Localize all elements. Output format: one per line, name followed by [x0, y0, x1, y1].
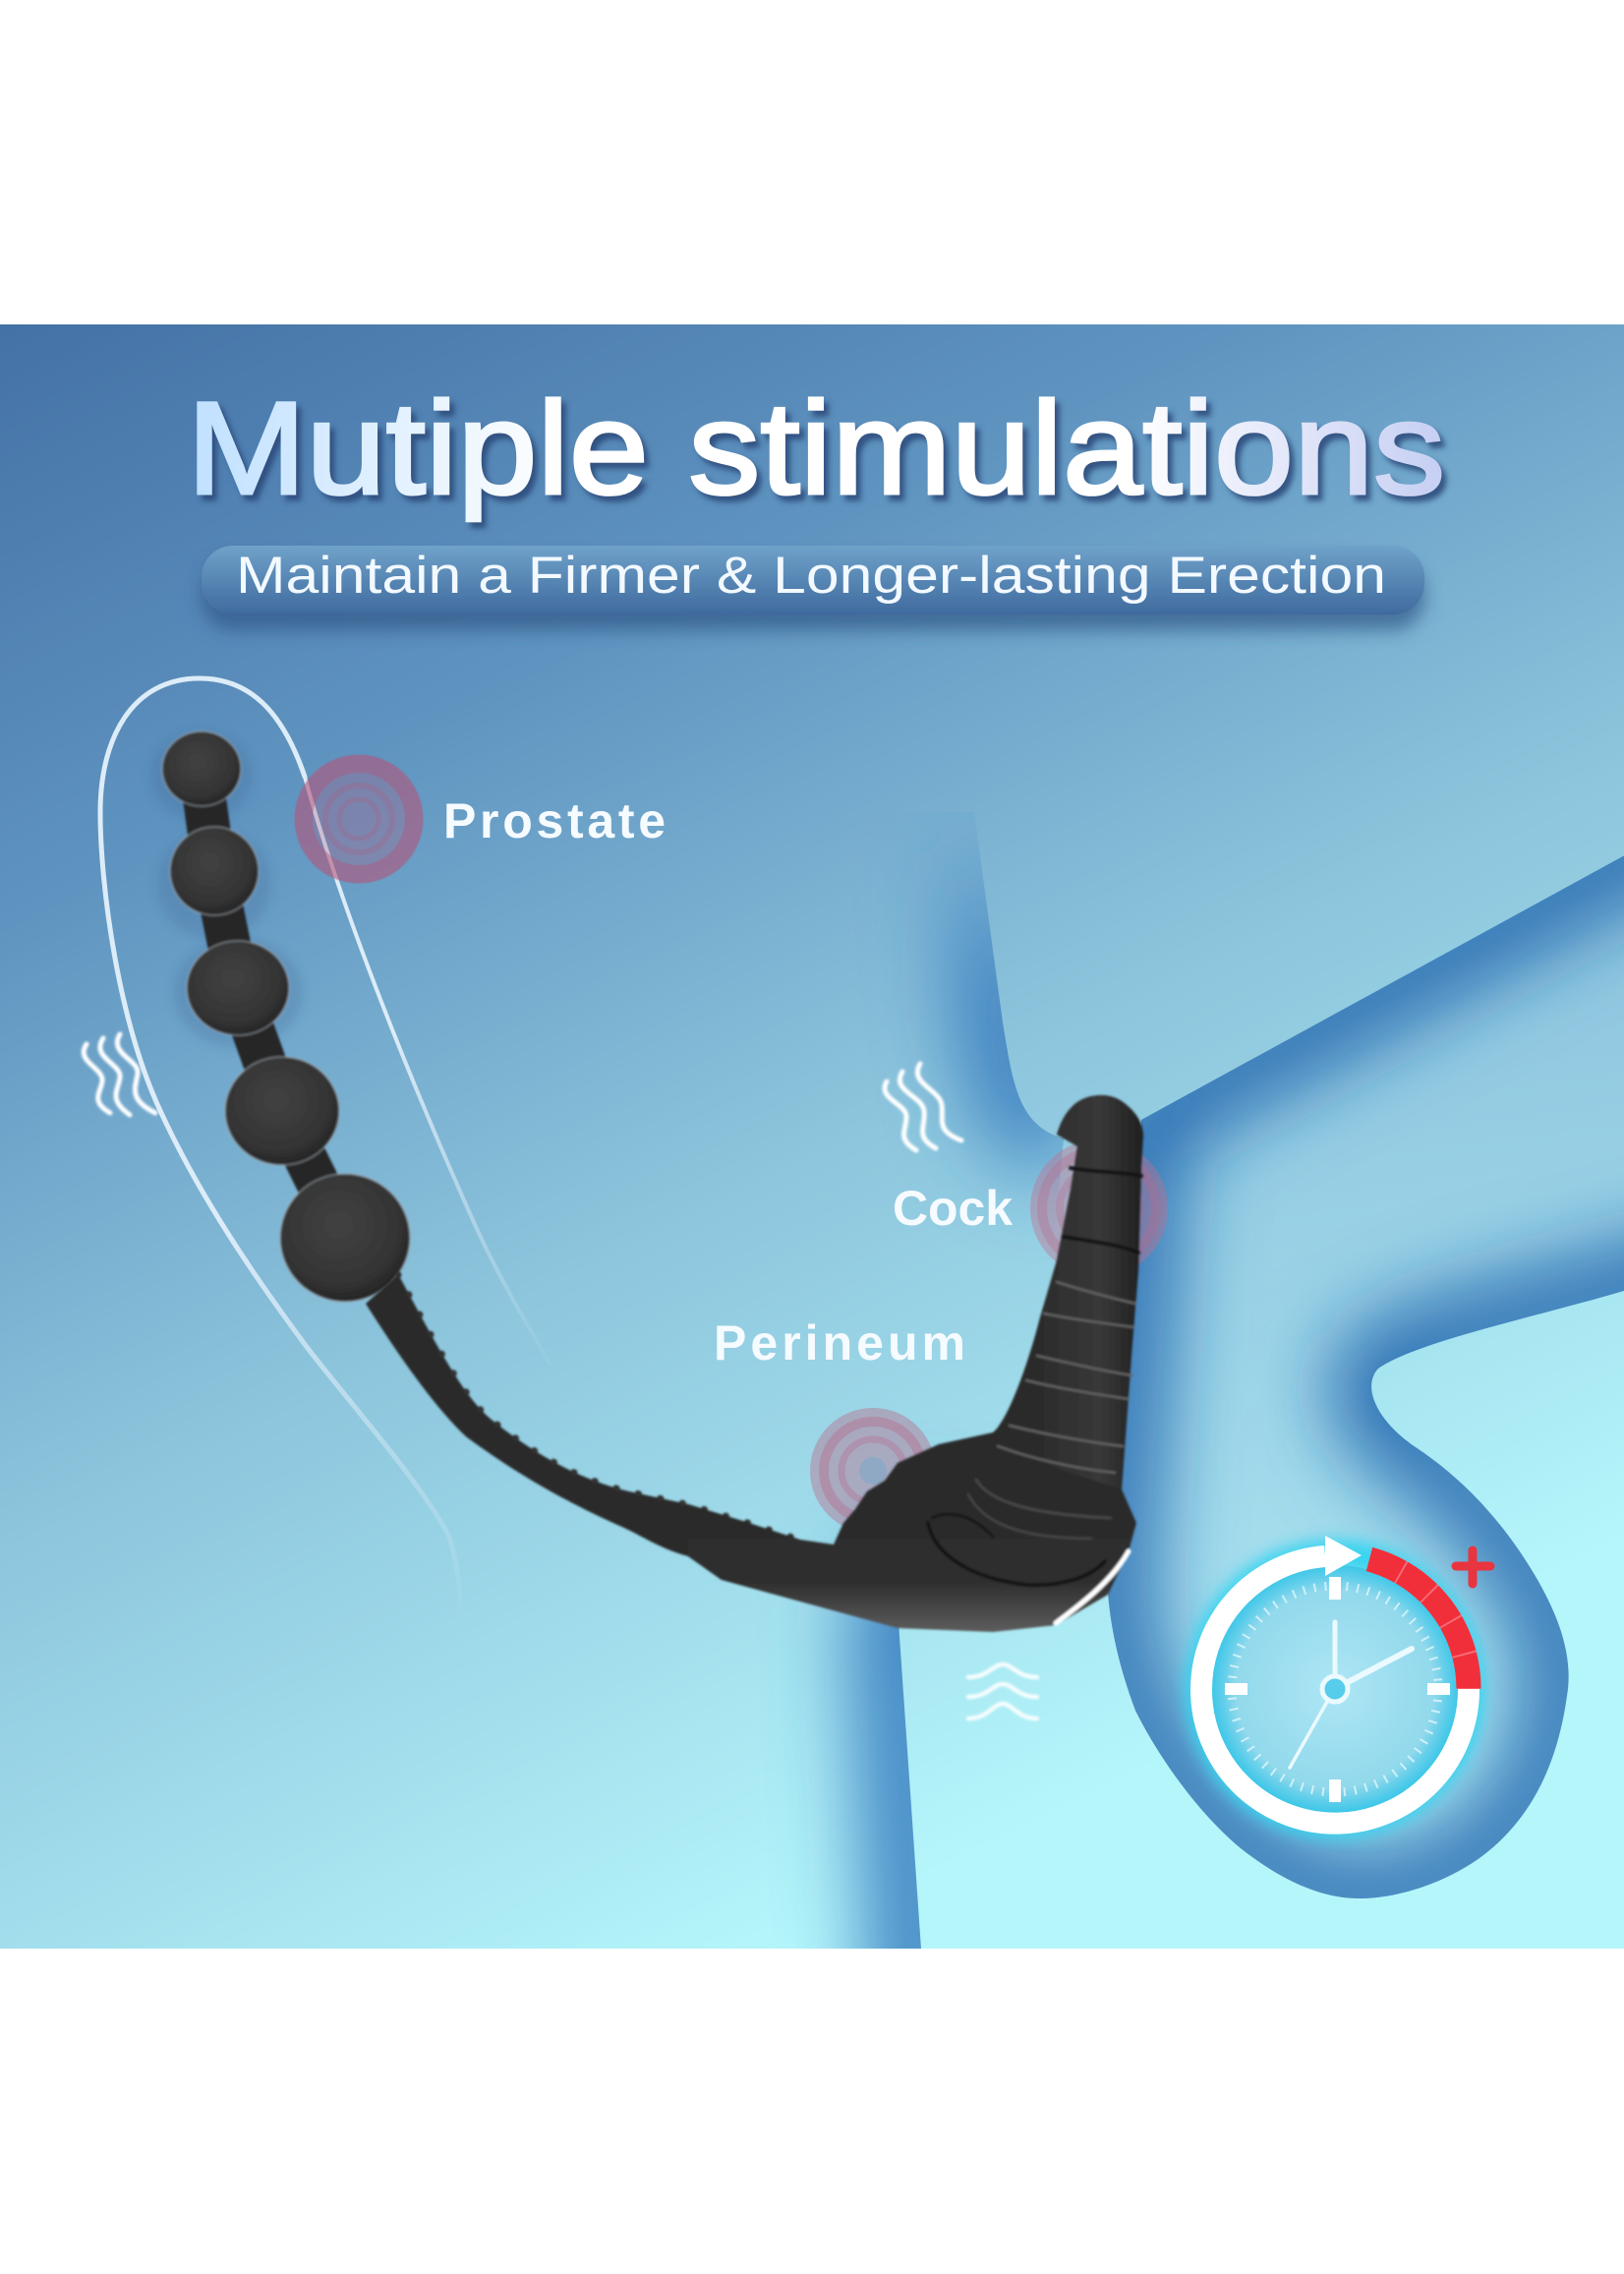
- stem: [1016, 1095, 1143, 1489]
- subtitle text: Maintain a Firmer & Longer-lasting Erection: [236, 547, 1386, 605]
- dial: [1211, 1565, 1459, 1813]
- clock hands: [1290, 1622, 1412, 1768]
- icon: clock with extended time: [1200, 1536, 1490, 1824]
- glow: [1200, 1554, 1470, 1824]
- connectors: [202, 777, 345, 1238]
- hour ticks: [1225, 1577, 1450, 1802]
- panel: blue background: [0, 324, 1624, 2045]
- red extension arc: [1369, 1559, 1469, 1689]
- label: Cock: Cock: [893, 1181, 1013, 1236]
- infographic canvas: [0, 324, 1624, 1949]
- icon: vibration waves left: [84, 1034, 155, 1115]
- curved outline around beads: [100, 678, 551, 1617]
- grooves: [928, 1168, 1141, 1585]
- vibration halos: [150, 731, 303, 1048]
- white light strip: [1056, 1551, 1129, 1623]
- icon: vibration waves bottom: [968, 1664, 1037, 1719]
- body silhouette: right side with scrotal curve: [1108, 749, 1624, 1898]
- label: Prostate: Prostate: [443, 793, 666, 848]
- body silhouette: left side shadow: [899, 812, 1064, 2045]
- title: Mutiple stimulations: [187, 376, 1445, 522]
- target rings: prostate: [294, 754, 424, 884]
- device: tail and ring: [366, 1095, 1143, 1632]
- tail bumps: [398, 1274, 800, 1540]
- label: Perineum: Perineum: [714, 1315, 965, 1370]
- icon: vibration waves centre: [885, 1064, 961, 1150]
- base: [688, 1095, 1143, 1632]
- target rings: cock: [1030, 1139, 1168, 1277]
- white ring with arrow: [1201, 1536, 1469, 1824]
- target rings: perineum: [810, 1408, 936, 1534]
- subtitle pill: [202, 546, 1424, 614]
- minute ticks: [1232, 1586, 1438, 1792]
- tail: [366, 1274, 749, 1580]
- bead chain: [150, 731, 410, 1302]
- plus sign: [1456, 1550, 1490, 1584]
- beads: [162, 731, 410, 1302]
